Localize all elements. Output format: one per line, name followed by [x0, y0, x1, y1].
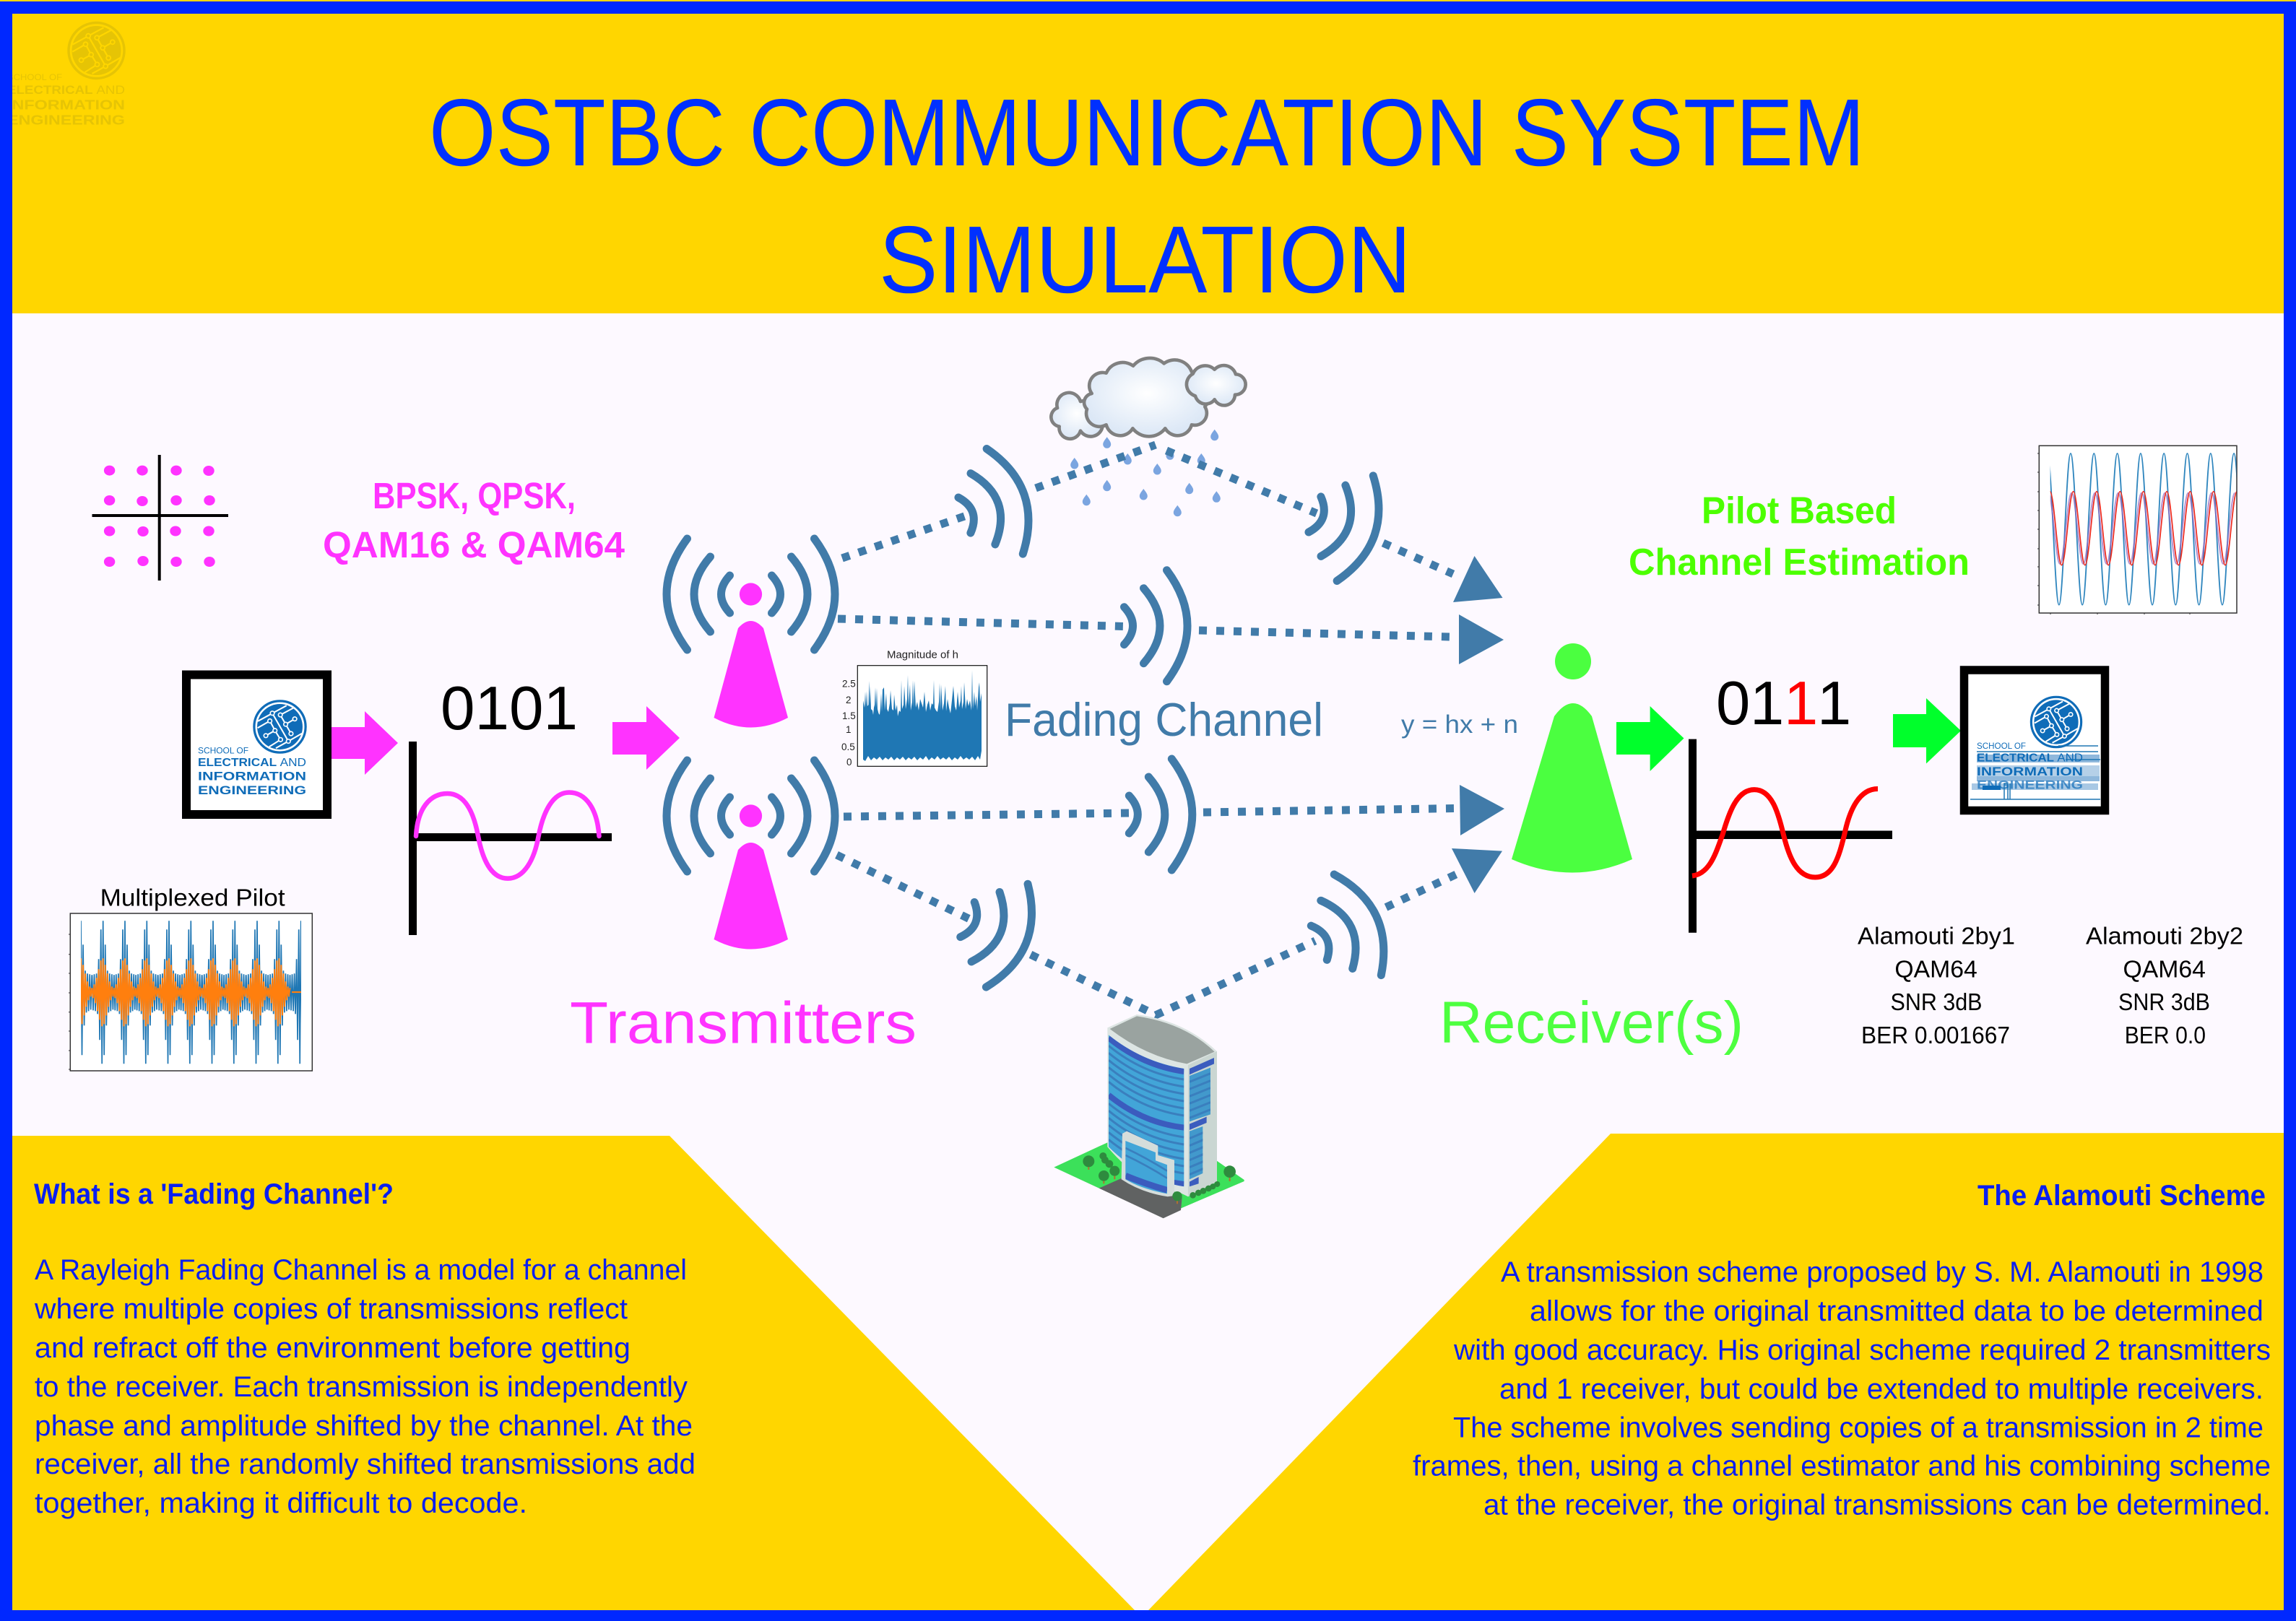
- results: alamouti 2by2: [2086, 923, 2243, 1048]
- fading channel paths: [836, 442, 1504, 1016]
- icon: school crest: [254, 701, 306, 752]
- received waveform: [1689, 739, 1892, 933]
- channel estimation label: Channel Estimation: [1629, 542, 1970, 583]
- results: alamouti 2by1: QAM64: [1894, 956, 1977, 983]
- results: alamouti 2by2: BER 0.0: [2125, 1022, 2206, 1048]
- transmitters label: Transmitters: [570, 991, 917, 1056]
- transmitted bits: 0101: [441, 674, 578, 743]
- watermark text: SCHOOL OF: [7, 72, 62, 82]
- icon: school crest: [2031, 697, 2081, 747]
- axis labels: 0.5: [841, 742, 855, 752]
- modulation label: QAM16 & QAM64: [323, 524, 625, 565]
- results: alamouti 2by2: QAM64: [2123, 956, 2206, 983]
- title: SIMULATION: [879, 207, 1411, 313]
- text block: alamouti explanation: at the receiver, the original transmissions can be determined.: [1483, 1489, 2271, 1521]
- heading: fading channel: What is a 'Fading Channel'?: [34, 1178, 394, 1210]
- text block: fading channel explanation: together, making it difficult to decode.: [35, 1487, 527, 1519]
- received bits: 0111: [1716, 669, 1851, 738]
- logo text: SCHOOL OF: [198, 745, 248, 755]
- axis labels: 1.5: [842, 710, 856, 721]
- text block: fading channel explanation: [34, 1254, 696, 1519]
- panel: what is a fading channel: [0, 1136, 1145, 1621]
- arrow: demodulator to output: [1893, 698, 1961, 764]
- results: alamouti 2by2: SNR 3dB: [2118, 988, 2210, 1015]
- receiver antenna: [1512, 643, 1632, 872]
- text block: fading channel explanation: phase and amplitude shifted by the channel. At the: [35, 1410, 693, 1442]
- logo text: ELECTRICAL AND: [198, 757, 306, 769]
- modulation label: [323, 475, 625, 565]
- output image box with distorted logo: [1964, 670, 2105, 810]
- logo text: ENGINEERING: [1977, 778, 2083, 791]
- title: [429, 79, 1865, 313]
- axis labels: 1: [846, 724, 852, 735]
- text block: fading channel explanation: to the receiver. Each transmission is independently: [35, 1371, 688, 1403]
- multiplexed pilot chart: [69, 885, 312, 1071]
- channel equation: y = hx + n: [1401, 710, 1518, 739]
- results: alamouti 2by1: SNR 3dB: [1891, 988, 1982, 1015]
- logo text: [1977, 741, 2083, 791]
- transmitter 2: [667, 760, 835, 949]
- text block: alamouti explanation: and 1 receiver, but could be extended to multiple receivers.: [1499, 1373, 2263, 1405]
- text block: alamouti explanation: The scheme involves sending copies of a transmission in 2 time: [1453, 1412, 2263, 1444]
- icon: school crest watermark: [69, 23, 124, 78]
- watermark text: ELECTRICAL AND: [7, 83, 125, 97]
- logo text: INFORMATION: [1977, 765, 2083, 778]
- tower: [1107, 1014, 1217, 1196]
- title: OSTBC COMMUNICATION SYSTEM: [429, 79, 1865, 186]
- entrance: [1122, 1131, 1174, 1196]
- watermark text: ENGINEERING: [7, 113, 125, 128]
- arrowheads: [1452, 556, 1504, 893]
- chart title: Magnitude of h: [887, 649, 958, 661]
- text block: alamouti explanation: frames, then, using a channel estimator and his combining scheme: [1413, 1450, 2271, 1482]
- text block: alamouti explanation: A transmission scheme proposed by S. M. Alamouti in 1998: [1501, 1256, 2263, 1288]
- ground: [1054, 1142, 1244, 1210]
- text block: fading channel explanation: receiver, all the randomly shifted transmissions add: [35, 1448, 696, 1480]
- receiver label: Receiver(s): [1439, 990, 1743, 1056]
- source image box with logo: [186, 674, 327, 814]
- logo text: INFORMATION: [198, 770, 306, 783]
- axis labels: 2: [846, 695, 852, 705]
- dotted signal lines: [836, 445, 1456, 1016]
- clouds: [1051, 358, 1246, 439]
- constellation diagram: [92, 455, 228, 581]
- axis labels: 2.5: [842, 679, 856, 689]
- logo text: ELECTRICAL AND: [1977, 752, 2083, 765]
- channel estimate chart: [2037, 446, 2245, 614]
- watermark text: [7, 72, 125, 128]
- transmitted waveform: [409, 742, 612, 935]
- heading: alamouti scheme: The Alamouti Scheme: [1977, 1180, 2266, 1212]
- logo watermark: [7, 23, 125, 128]
- text block: alamouti explanation: with good accuracy. His original scheme required 2 transmitters: [1453, 1334, 2271, 1366]
- trees: [1083, 1152, 1236, 1204]
- radio wave icons: [946, 442, 1400, 995]
- arrow: receiver to demodulator: [1616, 706, 1684, 771]
- results: alamouti 2by1: [1858, 923, 2015, 1048]
- transmitter 1: [667, 539, 835, 728]
- axis labels: [841, 679, 856, 768]
- arrow: source to modulator: [332, 711, 398, 775]
- logo text: ENGINEERING: [198, 783, 306, 797]
- channel estimation label: [1629, 490, 1970, 583]
- results: alamouti 2by1: BER 0.001667: [1861, 1022, 2010, 1048]
- modulation label: BPSK, QPSK,: [373, 475, 576, 516]
- logo text: SCHOOL OF: [1977, 741, 2026, 751]
- corruption stripes: [1970, 746, 2100, 799]
- channel estimation label: Pilot Based: [1702, 490, 1897, 532]
- text block: alamouti explanation: allows for the original transmitted data to be determined: [1530, 1295, 2263, 1327]
- logo text: [198, 745, 306, 797]
- results: alamouti 2by2: Alamouti 2by2: [2086, 923, 2243, 949]
- watermark text: INFORMATION: [7, 98, 125, 113]
- chart title: Multiplexed Pilot: [100, 885, 285, 911]
- results: alamouti 2by1: Alamouti 2by1: [1858, 923, 2015, 949]
- axis labels: 0: [846, 757, 852, 768]
- rain cloud: [1051, 358, 1246, 516]
- rain drops: [1070, 430, 1221, 516]
- text block: fading channel explanation: and refract off the environment before getting: [35, 1332, 631, 1364]
- panel: the alamouti scheme: [1138, 1133, 2296, 1621]
- text block: fading channel explanation: A Rayleigh Fading Channel is a model for a channel: [35, 1254, 687, 1286]
- text block: fading channel explanation: where multiple copies of transmissions reflect: [34, 1293, 628, 1325]
- fading channel label: Fading Channel: [1005, 693, 1323, 746]
- header band: [0, 0, 2296, 313]
- building: [1054, 1014, 1244, 1218]
- text block: alamouti explanation: [1413, 1256, 2271, 1521]
- magnitude of h chart: [841, 649, 987, 768]
- arrow: modulator to transmitters: [612, 706, 680, 770]
